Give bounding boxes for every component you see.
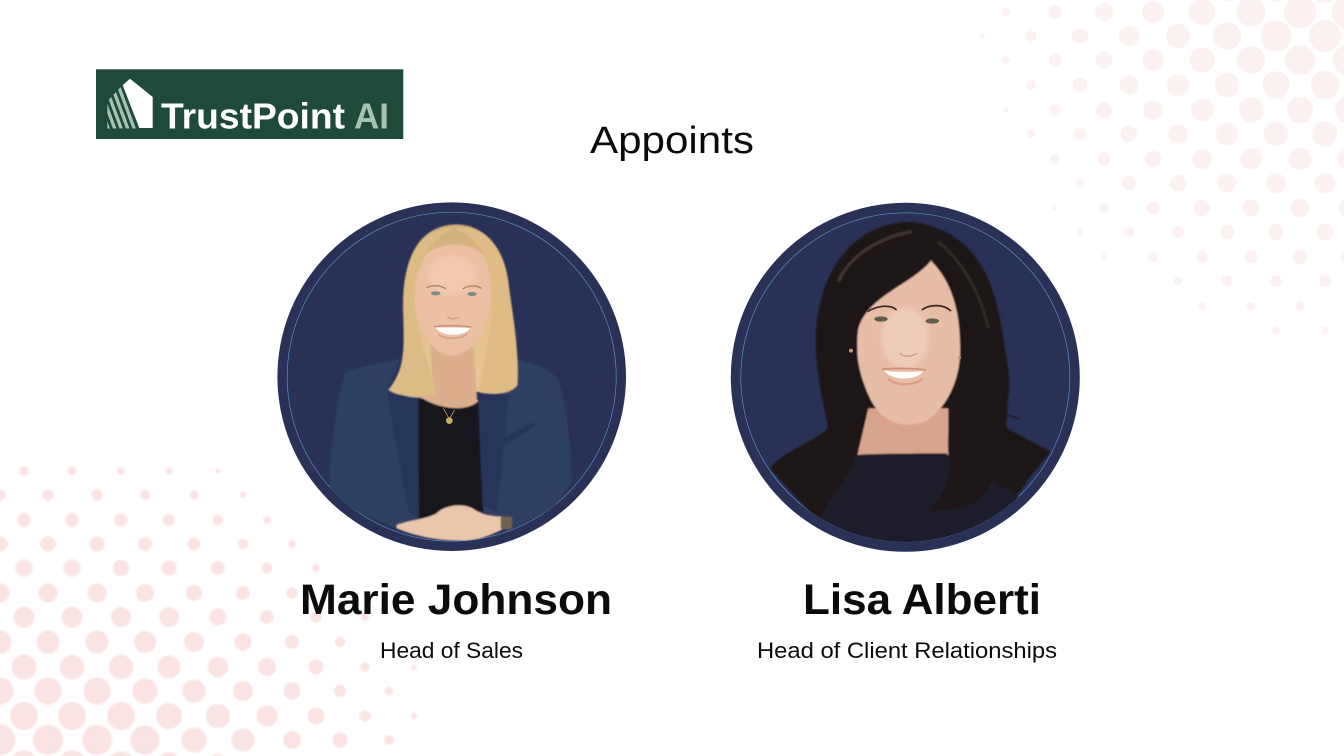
necklace: [443, 408, 455, 424]
name: Lisa Alberti: Lisa Alberti: [803, 576, 1041, 624]
role: Head of Sales: Head of Sales: [380, 638, 523, 663]
logo wordmark: AI: [354, 96, 389, 136]
icon: logo building: [107, 78, 153, 128]
heading: Appoints: Appoints: [590, 120, 754, 162]
background: bottom-left halftone dots: [0, 466, 417, 756]
face features: [849, 306, 961, 384]
portrait: Lisa Alberti: [731, 203, 1080, 552]
role: Head of Client Relationships: Head of Client Relationships: [757, 638, 1057, 663]
logo wordmark: TrustPoint: [161, 96, 345, 136]
portrait: Marie Johnson: [277, 202, 626, 551]
background: top-right halftone dots: [979, 0, 1344, 334]
face features: [427, 286, 481, 338]
logo: TrustPoint AI: [90, 69, 403, 139]
name: Marie Johnson: Marie Johnson: [300, 576, 612, 624]
